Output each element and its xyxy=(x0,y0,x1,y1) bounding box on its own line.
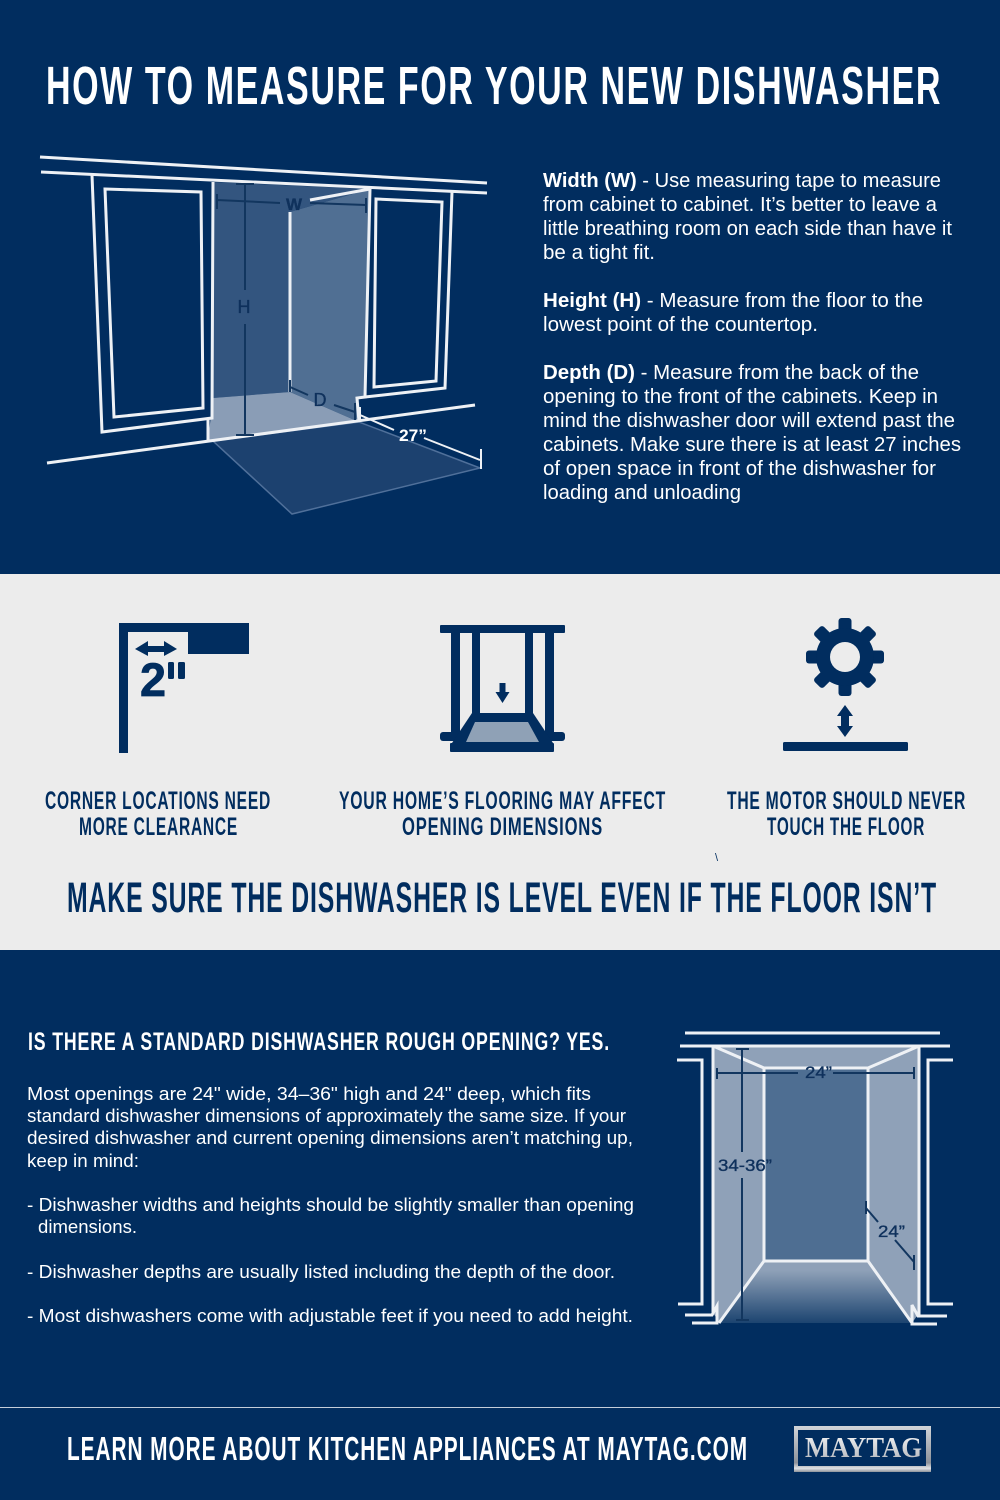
diagram: measuring the opening xyxy=(40,157,487,514)
text block: standard opening details: Most openings are 24" wide, 34–36" high and 24" deep, which fits xyxy=(27,1083,591,1104)
text block: width, height, depth instructions: opening to the front of the cabinets. Keep in xyxy=(543,386,938,408)
opening floor xyxy=(208,392,359,441)
text block: width, height, depth instructions: little breathing room on each side than have it xyxy=(543,218,952,240)
logo: Maytag xyxy=(794,1426,931,1472)
text block: standard opening details xyxy=(27,1083,634,1326)
label depth 24 inches: 24” xyxy=(878,1223,905,1241)
icon: corner clearance: 2 xyxy=(140,653,166,706)
cabinet outlines xyxy=(40,157,487,463)
opening back wall xyxy=(213,182,370,398)
footer divider xyxy=(0,1407,1000,1408)
text block: standard opening details: standard dishwasher dimensions of approximately the same size. If your xyxy=(27,1105,626,1126)
opening side wall xyxy=(290,189,370,422)
floor clearance area xyxy=(213,422,480,514)
text block: standard opening details: - Dishwasher widths and heights should be slightly smaller than opening xyxy=(27,1194,634,1215)
heading: motor xyxy=(727,787,966,841)
text block: width, height, depth instructions: mind the dishwasher door will extend past the xyxy=(543,410,955,432)
label H: H xyxy=(238,297,250,317)
heading: flooring: OPENING DIMENSIONS xyxy=(402,813,603,841)
heading: flooring: YOUR HOME’S FLOORING MAY AFFECT xyxy=(339,787,666,815)
panel: tips band xyxy=(0,574,1000,950)
text block: width, height, depth instructions: Width (W) - Use measuring tape to measure xyxy=(543,170,941,192)
logo: Maytag: MAYTAG xyxy=(805,1433,922,1464)
outlines xyxy=(677,1033,953,1324)
heading: flooring xyxy=(339,787,666,841)
label W: W xyxy=(286,195,303,214)
label 27 inches: 27” xyxy=(399,426,427,445)
heading: corner locations xyxy=(45,787,271,841)
text block: width, height, depth instructions: loading and unloading xyxy=(543,482,741,504)
side and top walls xyxy=(713,1046,919,1323)
label width 24 inches: 24” xyxy=(805,1064,832,1082)
text block: standard opening details: - Dishwasher depths are usually listed including the depth of the door. xyxy=(27,1261,615,1282)
text block: width, height, depth instructions: Depth (D) - Measure from the back of the xyxy=(543,362,919,384)
text block: standard opening details: - Most dishwashers come with adjustable feet if you need to add height. xyxy=(27,1305,633,1326)
back wall xyxy=(764,1068,868,1261)
text block: width, height, depth instructions: Height (H) - Measure from the floor to the xyxy=(543,290,923,312)
text block: width, height, depth instructions: from cabinet to cabinet. It’s better to leave a xyxy=(543,194,938,216)
label height 34-36 inches: 34-36” xyxy=(718,1157,772,1175)
heading: corner locations: CORNER LOCATIONS NEED xyxy=(45,787,271,815)
text block: width, height, depth instructions: lowest point of the countertop. xyxy=(543,314,818,336)
heading: standard rough opening: IS THERE A STANDARD DISHWASHER ROUGH OPENING? YES. xyxy=(28,1028,610,1056)
icon: flooring affects opening xyxy=(440,625,565,752)
stray mark: \ xyxy=(715,852,719,864)
dimension lines xyxy=(217,184,366,435)
diagram: standard rough opening xyxy=(677,1033,953,1324)
text block: standard opening details: dimensions. xyxy=(38,1216,137,1237)
text block: width, height, depth instructions: be a tight fit. xyxy=(543,242,655,264)
floor xyxy=(720,1261,912,1323)
text block: standard opening details: desired dishwasher and current opening dimensions aren’t matching up, xyxy=(27,1127,633,1148)
label D: D xyxy=(314,390,326,410)
text block: width, height, depth instructions: of open space in front of the dishwasher for xyxy=(543,458,936,480)
icon: corner clearance xyxy=(119,623,249,753)
text block: width, height, depth instructions xyxy=(543,170,961,504)
text block: width, height, depth instructions: cabinets. Make sure there is at least 27 inches xyxy=(543,434,961,456)
dimension lines xyxy=(717,1049,914,1320)
icon: motor above floor xyxy=(783,618,908,751)
text block: standard opening details: keep in mind: xyxy=(27,1150,139,1171)
27 inch dimension line xyxy=(360,407,481,469)
heading: corner locations: MORE CLEARANCE xyxy=(79,813,238,841)
